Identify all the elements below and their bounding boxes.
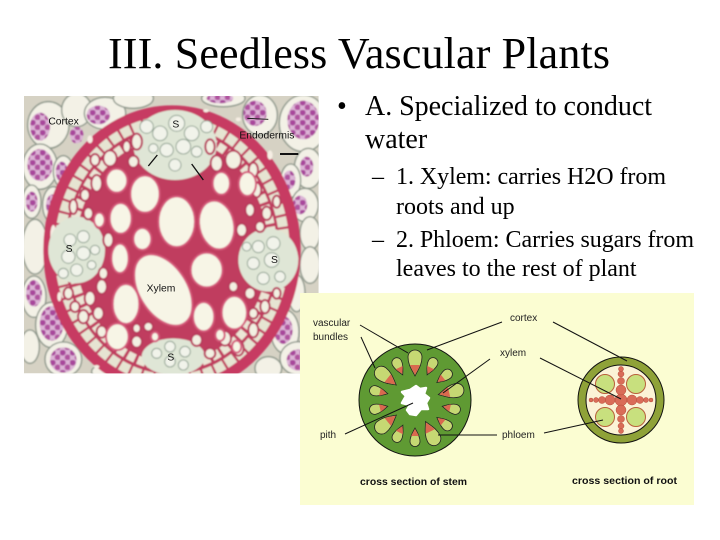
diagram captions: cross section of stem — [360, 476, 467, 488]
diagram leader lines — [345, 322, 627, 435]
phloem S regions — [48, 110, 298, 375]
cortex cells — [24, 96, 319, 374]
small peripheral cells — [64, 134, 281, 359]
xylem vessels — [94, 169, 256, 353]
phloem circles — [596, 374, 646, 426]
bullet list text — [337, 91, 694, 282]
photo: root micrograph — [24, 96, 319, 374]
diagram panel — [300, 293, 694, 505]
micrograph labels — [48, 117, 294, 363]
micrograph labels: Cortex — [48, 117, 80, 128]
diagram labels: cortex — [510, 313, 537, 324]
micrograph labels: S — [172, 120, 179, 131]
pale cell zone — [59, 121, 285, 379]
diagram labels: pith — [320, 430, 336, 441]
sub-bullet: phloem: – — [371, 227, 385, 253]
xylem cross — [589, 366, 653, 434]
micrograph labels: Endodermis — [239, 131, 294, 142]
sub-bullet: phloem — [371, 227, 694, 282]
micrograph labels: Xylem — [147, 284, 175, 295]
sub-bullet: xylem — [371, 164, 666, 220]
micrograph labels: S — [66, 244, 73, 255]
main bullet: A. Specialized to conduct — [365, 91, 652, 122]
pith — [402, 386, 429, 415]
root cross-section — [578, 357, 664, 443]
vascular bundles — [369, 350, 465, 448]
endodermis ring — [49, 111, 295, 389]
diagram labels: bundles — [313, 332, 348, 343]
micrograph labels: S — [167, 352, 174, 363]
main bullet: water — [365, 124, 428, 155]
diagram labels: phloem — [502, 430, 535, 441]
sub-bullet: xylem: roots and up — [396, 194, 515, 220]
title: III. Seedless Vascular Plants — [108, 29, 610, 78]
diagram labels — [313, 313, 537, 441]
sub-bullet: xylem: 1. Xylem: carries H2O from — [396, 164, 666, 190]
diagram labels: vascular — [313, 318, 351, 329]
main bullet: • — [337, 91, 347, 122]
sub-bullet: phloem: leaves to the rest of plant — [396, 256, 637, 282]
diagram captions: cross section of root — [572, 475, 678, 487]
main bullet — [337, 91, 652, 155]
diagram captions — [360, 475, 678, 488]
diagram labels: xylem — [500, 348, 526, 359]
micrograph arrows — [148, 118, 298, 180]
sub-bullet: phloem: 2. Phloem: Carries sugars from — [396, 227, 694, 253]
stem cross-section — [359, 344, 471, 456]
micrograph labels: S — [271, 255, 278, 266]
sub-bullet: xylem: – — [371, 164, 385, 190]
